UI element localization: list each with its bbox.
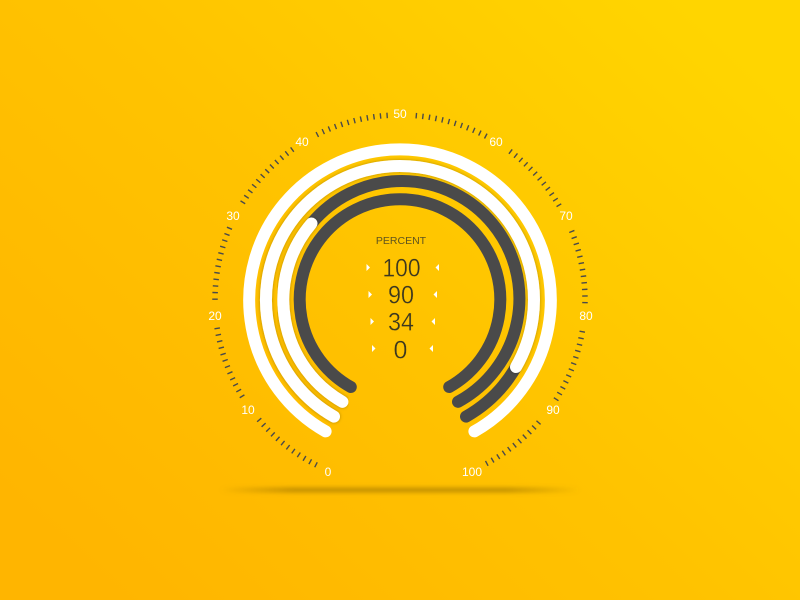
value readouts: 100 bbox=[382, 254, 420, 282]
scale labels: 30 bbox=[226, 209, 240, 223]
value markers bbox=[366, 264, 439, 352]
ring: 34 percent bbox=[283, 181, 519, 402]
scale labels: 10 bbox=[241, 403, 255, 417]
ring: 100 percent bbox=[249, 149, 551, 431]
scale labels: 60 bbox=[489, 135, 503, 149]
value readouts: 90 bbox=[388, 282, 414, 310]
scale labels: 40 bbox=[295, 135, 309, 149]
scale labels: 100 bbox=[462, 465, 482, 479]
ring: 0 percent bbox=[300, 199, 500, 387]
scale labels: 0 bbox=[325, 465, 332, 479]
percent heading: PERCENT bbox=[376, 235, 427, 247]
scale labels: 90 bbox=[546, 403, 560, 417]
scale labels: 20 bbox=[208, 309, 222, 323]
scale labels: 70 bbox=[559, 209, 573, 223]
ring: 90 percent bbox=[266, 166, 534, 417]
value readouts: 0 bbox=[394, 336, 407, 364]
value readouts bbox=[382, 254, 420, 364]
scale labels: 80 bbox=[579, 309, 593, 323]
ground shadow bbox=[220, 488, 580, 492]
value readouts: 34 bbox=[388, 308, 414, 336]
scale labels bbox=[208, 107, 593, 479]
scale labels: 50 bbox=[393, 107, 407, 121]
tick marks scale bbox=[215, 115, 585, 465]
